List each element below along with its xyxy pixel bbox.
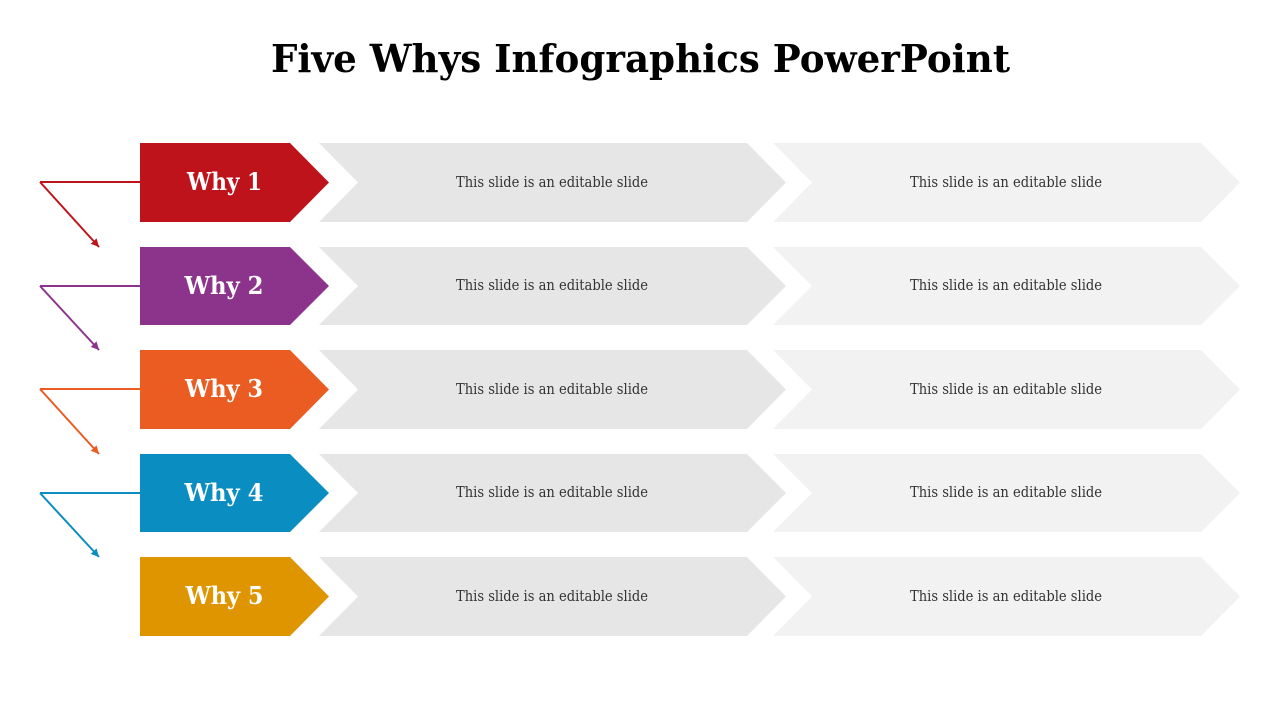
label arrow: Why 1 <box>140 143 329 222</box>
row: Why 5 <box>140 557 1240 636</box>
label arrow: Why 5 <box>140 557 329 636</box>
chevron: Why 5 first text: This slide is an editable slide <box>456 589 648 605</box>
chevron: Why 2 second text <box>773 247 1240 325</box>
chevron: Why 5 second text <box>773 557 1240 636</box>
label arrow: Why 3: Why 3 <box>184 374 263 403</box>
chevron: Why 1 first text <box>319 143 786 222</box>
chevron: Why 5 second text: This slide is an editable slide <box>910 589 1102 605</box>
arrow: Why 4 connector <box>40 493 140 557</box>
chevron: Why 1 second text: This slide is an editable slide <box>910 175 1102 191</box>
chevron: Why 1 second text <box>773 143 1240 222</box>
row: Why 1 <box>40 143 1240 247</box>
label arrow: Why 2 <box>140 247 329 325</box>
row: Why 4 <box>40 454 1240 557</box>
label arrow: Why 3 <box>140 350 329 429</box>
arrow: Why 3 connector <box>40 389 140 454</box>
chevron: Why 3 second text <box>773 350 1240 429</box>
title: Five Whys Infographics PowerPoint <box>271 36 1010 81</box>
arrow: Why 2 connector <box>40 286 140 350</box>
chevron: Why 3 first text <box>319 350 786 429</box>
chevron: Why 4 second text <box>773 454 1240 532</box>
label arrow: Why 2: Why 2 <box>184 271 264 300</box>
chevron: Why 3 second text: This slide is an editable slide <box>910 382 1102 398</box>
chevron: Why 3 first text: This slide is an editable slide <box>456 382 648 398</box>
chevron: Why 1 first text: This slide is an editable slide <box>456 175 648 191</box>
chevron: Why 2 second text: This slide is an editable slide <box>910 278 1102 294</box>
chevron: Why 2 first text <box>319 247 786 325</box>
label arrow: Why 5: Why 5 <box>185 581 264 610</box>
label arrow: Why 4: Why 4 <box>184 478 264 507</box>
chevron: Why 4 second text: This slide is an editable slide <box>910 485 1102 501</box>
label arrow: Why 4 <box>140 454 329 532</box>
chevron: Why 5 first text <box>319 557 786 636</box>
row: Why 3 <box>40 350 1240 454</box>
chevron: Why 4 first text: This slide is an editable slide <box>456 485 648 501</box>
arrow: Why 1 connector <box>40 182 140 247</box>
label arrow: Why 1: Why 1 <box>186 167 262 196</box>
row: Why 2 <box>40 247 1240 350</box>
chevron: Why 2 first text: This slide is an editable slide <box>456 278 648 294</box>
chevron: Why 4 first text <box>319 454 786 532</box>
